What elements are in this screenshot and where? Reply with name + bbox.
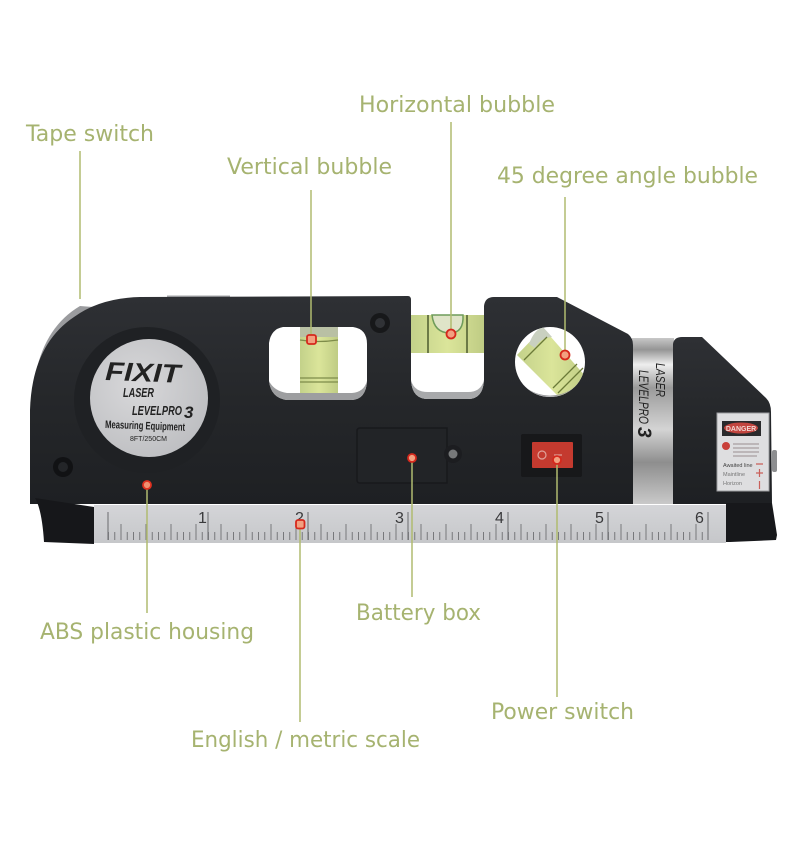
callout: Tape switch: Tape switch [25, 122, 154, 147]
screw near bubble [370, 313, 390, 333]
tape ruler: 5 [595, 510, 604, 527]
power switch [521, 434, 582, 477]
battery box [357, 428, 462, 483]
callout: English / metric scale: English / metric scale [191, 728, 420, 753]
callout: Power switch: Power switch [491, 700, 634, 725]
callout: Battery box [356, 454, 481, 626]
metal label: LASER LEVELPRO 3 [633, 363, 668, 438]
disc label: 3 [184, 403, 194, 422]
tape ruler: 4 [495, 510, 504, 527]
disc label: Measuring Equipment [105, 419, 185, 434]
callout: English / metric scale [191, 520, 420, 753]
tape ruler: 6 [695, 510, 704, 527]
metal label: LASER LEVELPRO 3: LASER [653, 363, 668, 397]
tool: laser level illustration [30, 296, 777, 544]
callout: 45 degree angle bubble [497, 164, 758, 360]
right side knob [772, 450, 777, 472]
danger label: Awaited line [723, 463, 753, 469]
callout: 45 degree angle bubble: 45 degree angle bubble [497, 164, 758, 189]
45 degree bubble vial [517, 327, 587, 398]
left foot [35, 498, 94, 544]
callout: Power switch [491, 456, 634, 725]
callout: Horizontal bubble: Horizontal bubble [359, 93, 555, 118]
main housing [30, 296, 633, 504]
disc text: FIXIT: FIXIT [105, 356, 183, 389]
tape ruler: 3 [395, 510, 404, 527]
disc label [90, 339, 208, 457]
metal blade section [632, 338, 674, 504]
danger label [717, 413, 769, 491]
housing screw [53, 457, 73, 477]
danger label: Maintline [723, 472, 745, 478]
callout: Battery box: Battery box [356, 601, 481, 626]
metal label: LASER LEVELPRO 3: LEVELPRO [636, 370, 652, 424]
callout: Horizontal bubble [359, 93, 555, 338]
disc label: LASER [123, 385, 154, 400]
disc label: LEVELPRO [132, 403, 182, 418]
tape ruler: 2 [295, 510, 304, 527]
window bevels [269, 380, 572, 400]
disc label: 8FT/250CM [130, 436, 167, 443]
tape ruler [94, 505, 726, 543]
callout: ABS plastic housing [40, 481, 254, 645]
danger label: Horizon [723, 481, 742, 487]
vertical bubble vial [300, 327, 338, 399]
danger label: DANGER [726, 426, 756, 433]
callout: Vertical bubble [227, 155, 392, 344]
right foot [726, 503, 777, 542]
callout: Vertical bubble: Vertical bubble [227, 155, 392, 180]
horizontal bubble vial [411, 315, 484, 353]
ruler numbers: 1 [198, 510, 207, 527]
callout: ABS plastic housing: ABS plastic housing [40, 620, 254, 645]
tape disc recess [74, 327, 220, 473]
metal label: LASER LEVELPRO 3: 3 [633, 427, 654, 438]
tape switch on top of housing [36, 306, 97, 378]
right end housing [673, 337, 772, 504]
